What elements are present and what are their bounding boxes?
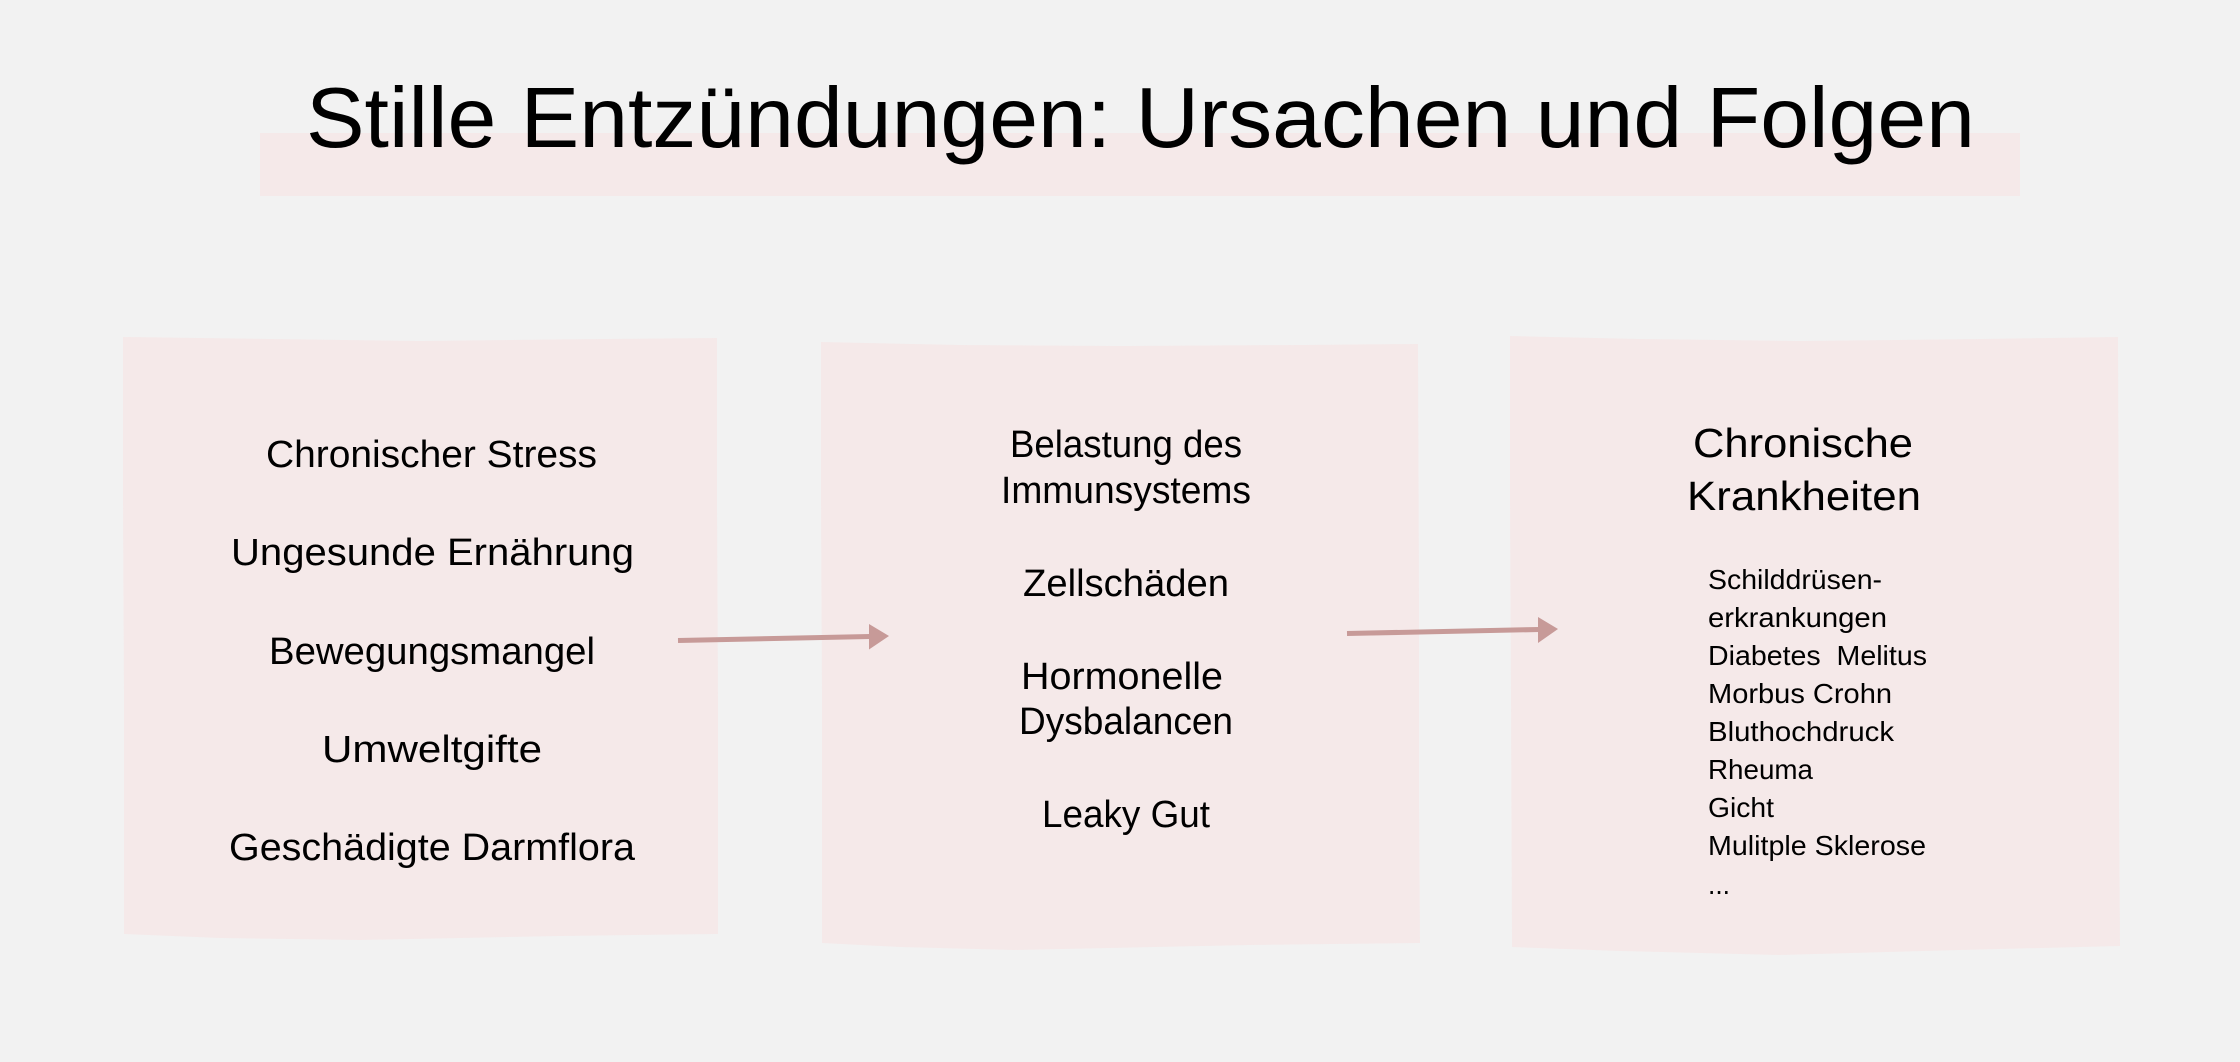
title: Stille Entzündungen: Ursachen und Folgen	[306, 71, 1975, 166]
effects list: Leaky Gut	[1042, 794, 1210, 836]
causes list: Ungesunde Ernährung	[231, 532, 634, 574]
causes list: Umweltgifte	[322, 729, 542, 771]
arrow: effects to chronic diseases	[1347, 617, 1558, 643]
panel heading	[1687, 420, 1921, 519]
panel: effects on the body	[821, 342, 1420, 950]
panel background: chronic diseases	[1510, 336, 2120, 955]
effects list: Hormonelle	[1021, 656, 1223, 698]
causes list: Bewegungsmangel	[269, 631, 595, 673]
panel: chronic diseases	[1510, 336, 2120, 955]
disease list: Rheuma	[1708, 754, 1813, 785]
disease list: Mulitple Sklerose	[1708, 830, 1926, 861]
panel heading: Chronische	[1693, 420, 1913, 466]
disease list: ...	[1708, 869, 1730, 900]
effects list: Zellschäden	[1023, 563, 1229, 605]
arrow: causes to effects	[678, 624, 889, 650]
effects list: Belastung des	[1010, 424, 1242, 466]
causes list	[229, 434, 636, 869]
title banner	[260, 133, 2020, 196]
disease list: erkrankungen	[1708, 602, 1887, 633]
effects list	[1001, 424, 1251, 836]
disease list: Bluthochdruck	[1708, 716, 1895, 747]
causes list: Geschädigte Darmflora	[229, 827, 636, 869]
disease list: Schilddrüsen-	[1708, 564, 1882, 595]
disease list: Morbus Crohn	[1708, 678, 1892, 709]
disease list: Diabetes Melitus	[1708, 640, 1927, 671]
disease list: Gicht	[1708, 792, 1774, 823]
effects list: Immunsystems	[1001, 470, 1251, 512]
panel: causes	[123, 337, 718, 940]
panel heading: Krankheiten	[1687, 473, 1921, 519]
panel background: effects	[821, 342, 1420, 950]
disease list	[1708, 564, 1927, 900]
effects list: Dysbalancen	[1019, 701, 1233, 743]
causes list: Chronischer Stress	[266, 434, 597, 476]
panel background: causes	[123, 337, 718, 940]
